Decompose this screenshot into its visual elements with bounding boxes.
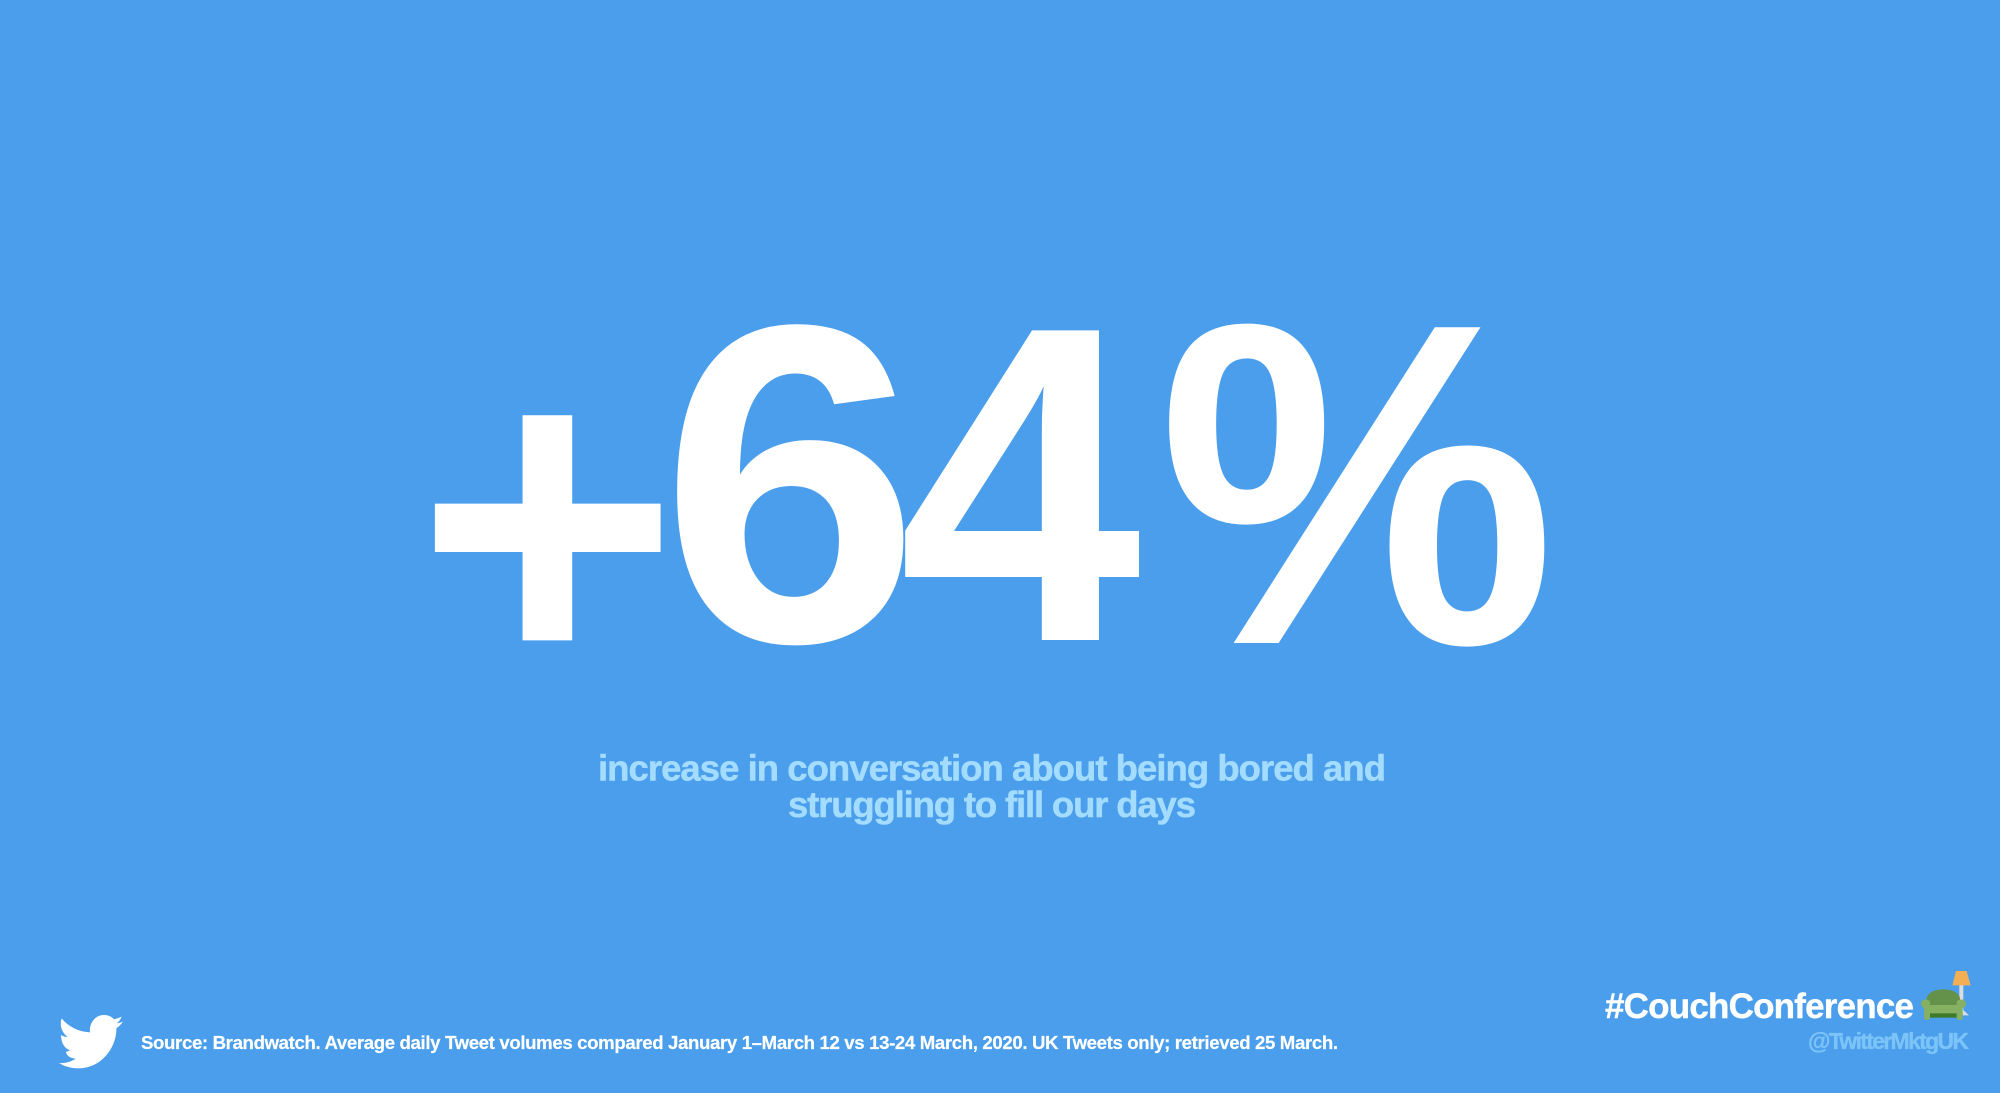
headline statistic: % (1158, 229, 1556, 741)
icon: twitter bird (59, 1015, 123, 1068)
subtitle: struggling to fill our days (788, 784, 1196, 825)
headline statistic: 4 (899, 233, 1144, 735)
handle: @TwitterMktgUK (1808, 1028, 1969, 1054)
source note: Source: Brandwatch. Average daily Tweet volumes compared January 1–March 12 vs 13-24 March, 2020. UK Tweets only; retrieved 25 March. (141, 1032, 1338, 1053)
subtitle: increase in conversation about being bored and (598, 748, 1386, 788)
headline statistic: 6 (660, 231, 920, 737)
headline statistic (416, 229, 1556, 769)
headline statistic: + (416, 274, 679, 769)
icon: couch and lamp (1921, 971, 1971, 1020)
subtitle (598, 748, 1386, 825)
hashtag: #CouchConference (1605, 987, 1914, 1026)
